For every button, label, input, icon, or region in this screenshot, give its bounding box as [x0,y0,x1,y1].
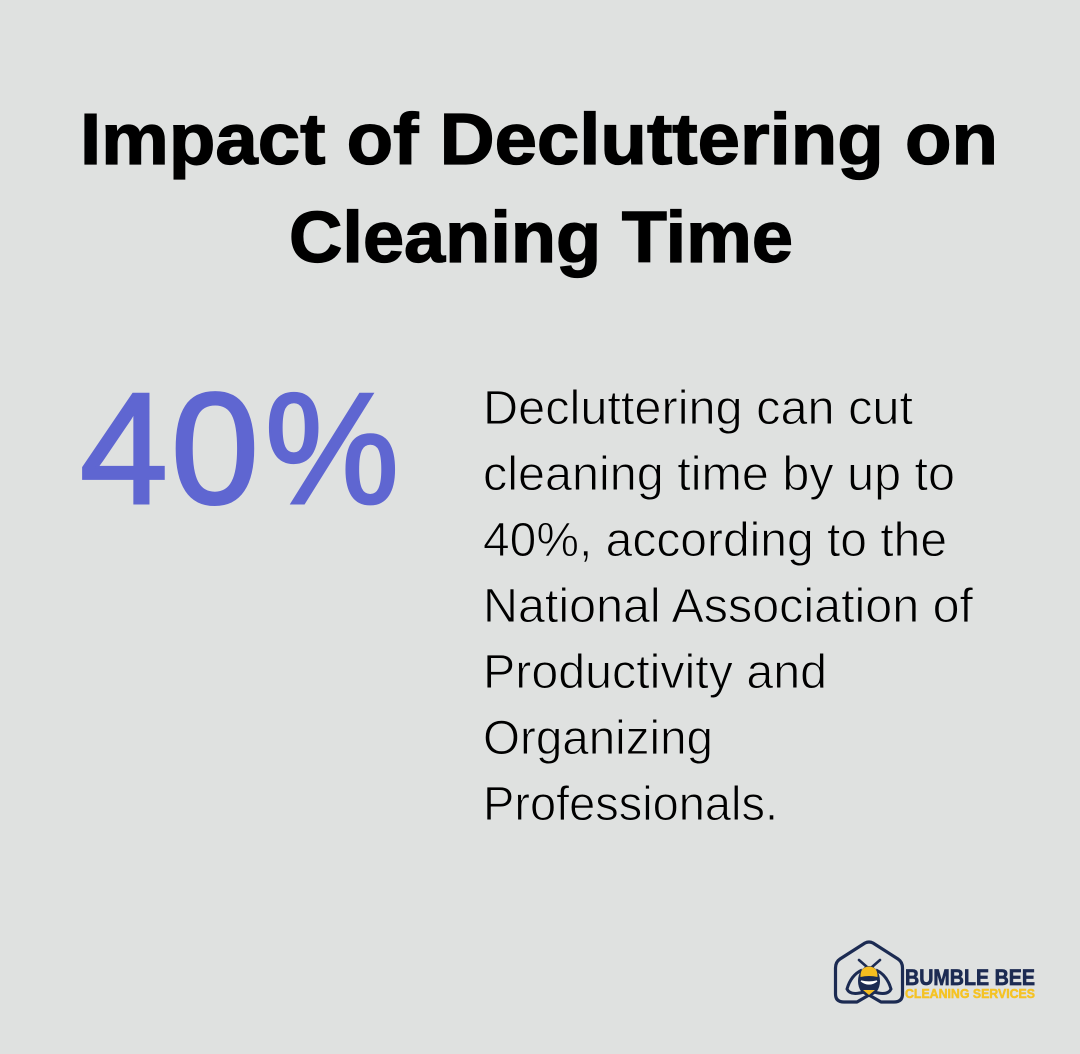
logo: Bumble Bee Cleaning Services [836,942,1035,1002]
big stat: 40%: 0 [171,361,259,537]
description text: Productivity and [483,646,827,699]
title: Impact of Decluttering on [80,100,998,180]
big stat: 40%: 4 [80,361,168,537]
title [80,100,998,278]
big stat: 40%: % [265,361,399,537]
title: Cleaning Time [289,198,793,278]
logo tagline: CLEANING SERVICES [905,987,1035,1001]
description text: National Association of [483,580,974,633]
description text: cleaning time by up to [483,448,955,501]
logo wordmark: BUMBLE BEE [905,965,1035,990]
description text: Organizing [483,712,713,765]
icon: house with bee [836,942,902,1002]
description text: Decluttering can cut [483,382,913,435]
description text: 40%, according to the [483,514,947,567]
description text: Professionals. [483,778,778,831]
description text [483,382,974,831]
big stat: 40% [80,361,399,537]
